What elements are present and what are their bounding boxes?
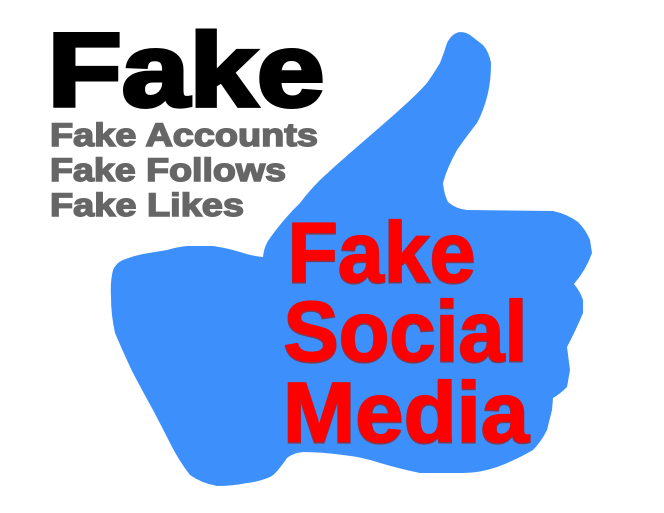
- headline shadow: Media: [283, 366, 530, 462]
- list item: Fake Follows: Fake Follows: [50, 152, 286, 188]
- headline: Fake Social Media: [283, 206, 530, 462]
- headline shadow: Fake: [288, 206, 476, 302]
- list item: Fake Accounts: Fake Accounts: [50, 117, 318, 153]
- headline red text: Fake: [288, 206, 476, 300]
- list item: Fake Likes: Fake Likes: [50, 187, 244, 223]
- headline shadow: Social: [284, 286, 528, 380]
- headline shadow: [283, 206, 530, 462]
- headline red text: Media: [283, 366, 530, 460]
- icon: blue thumbs up hand: [111, 32, 592, 486]
- title: Fake: Fake: [48, 13, 324, 129]
- list of fake items: [50, 117, 318, 223]
- headline red text: Social: [284, 284, 528, 380]
- headline red text: [283, 206, 530, 460]
